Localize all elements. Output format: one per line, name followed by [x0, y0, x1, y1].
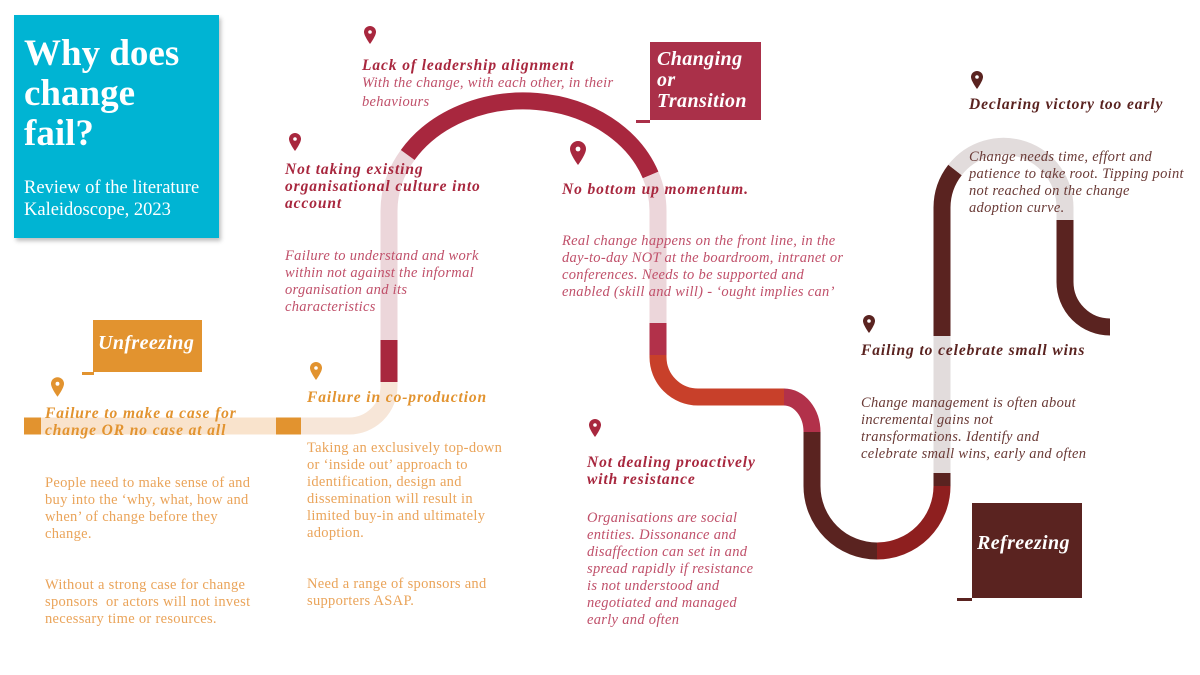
text: declaring victory: Change needs time, effort and [969, 149, 1152, 165]
stage box: Changing or Transition: Changing [657, 48, 742, 70]
text: resistance: with resistance [587, 471, 696, 488]
text: failure in co-production: dissemination will result in [307, 491, 473, 507]
text: leadership alignment: With the change, with each other, in their [362, 75, 613, 91]
text: small wins: Failing to celebrate small wins [861, 342, 1085, 359]
text: resistance: Not dealing proactively [587, 454, 756, 471]
text: failure in co-production: adoption. [307, 525, 364, 541]
title: change [24, 73, 135, 114]
text: declaring victory: patience to take root. Tipping point [969, 166, 1184, 182]
text: organisational culture [284, 161, 481, 315]
text: organisational culture: Failure to understand and work [285, 248, 479, 264]
text: failure to make a case: Without a strong case for change [45, 577, 245, 593]
text: failure to make a case: when’ of change before they [45, 509, 218, 525]
text: organisational culture: account [285, 195, 342, 212]
text: declaring victory: Declaring victory too early [969, 96, 1163, 113]
text: resistance: Organisations are social [587, 510, 737, 526]
text: resistance: early and often [587, 612, 679, 628]
subtitle: Review of the literature [24, 178, 199, 198]
text: failure to make a case: change OR no case at all [45, 422, 226, 439]
icon: pin leadership [364, 26, 376, 44]
text: resistance: entities. Dissonance and [587, 527, 736, 543]
text: failure in co-production: or ‘inside out’ approach to [307, 457, 468, 473]
text: resistance: disaffection can set in and [587, 544, 747, 560]
text: failure to make a case: necessary time or resources. [45, 611, 217, 627]
text: resistance: spread rapidly if resistance [587, 561, 753, 577]
text: leadership alignment: behaviours [362, 94, 429, 110]
stage box: Unfreezing: Unfreezing [98, 332, 194, 354]
text: declaring victory: not reached on the change [969, 183, 1130, 199]
icon: pin culture [289, 133, 301, 151]
text: bottom up momentum: conferences. Needs to be supported and [562, 267, 804, 283]
icon: pin co-production [310, 362, 322, 380]
text: failure to make a case [45, 405, 250, 627]
text: organisational culture: organisational culture into [285, 178, 481, 195]
text: failure in co-production: limited buy-in and ultimately [307, 508, 485, 524]
stage box: Changing or Transition [636, 42, 761, 123]
text: failure in co-production: supporters ASAP. [307, 593, 414, 609]
text: failure in co-production: Need a range of sponsors and [307, 576, 487, 592]
text: resistance [586, 454, 756, 628]
text: organisational culture: organisation and its [285, 282, 407, 298]
text: small wins [861, 342, 1086, 462]
text: bottom up momentum: day-to-day NOT at the boardroom, intranet or [562, 250, 843, 266]
text: resistance: is not understood and [587, 578, 719, 594]
text: bottom up momentum: enabled (skill and will) - ‘ought implies can’ [562, 284, 835, 300]
subtitle: Kaleidoscope, 2023 [24, 200, 171, 220]
text: organisational culture: within not against the informal [285, 265, 474, 281]
title panel [14, 15, 219, 238]
text: declaring victory [968, 96, 1184, 216]
icon: pin bottom up [570, 141, 586, 165]
text: failure in co-production: identification, design and [307, 474, 462, 490]
stage box: Unfreezing [82, 320, 202, 375]
icon: pin resistance [589, 419, 601, 437]
text: failure to make a case: change. [45, 526, 92, 542]
text: failure to make a case: Failure to make a case for [45, 405, 237, 422]
text: failure in co-production: Failure in co-production [307, 389, 487, 406]
stage box: Refreezing [957, 503, 1082, 601]
title [24, 33, 179, 154]
text: bottom up momentum: No bottom up momentum. [562, 181, 749, 198]
stage box: Changing or Transition: or [657, 69, 676, 91]
text: bottom up momentum [562, 181, 843, 300]
text: small wins: Change management is often about [861, 395, 1076, 411]
text: organisational culture: Not taking existing [285, 161, 424, 178]
text: declaring victory: adoption curve. [969, 200, 1065, 216]
text: failure to make a case: People need to make sense of and [45, 475, 250, 491]
icon: pin small wins [863, 315, 875, 333]
text: small wins: celebrate small wins, early and often [861, 446, 1086, 462]
stage box: Changing or Transition: Transition [657, 90, 747, 112]
text: failure to make a case: buy into the ‘why, what, how and [45, 492, 249, 508]
text: organisational culture: characteristics [285, 299, 376, 315]
icon: pin unfreezing [51, 377, 64, 397]
text: small wins: transformations. Identify and [861, 429, 1039, 445]
title: fail? [24, 113, 94, 154]
title: Why does [24, 33, 179, 74]
subtitle [24, 178, 199, 220]
stage box: Refreezing: Refreezing [977, 532, 1070, 554]
text: failure to make a case: sponsors or actors will not invest [45, 594, 250, 610]
text: small wins: incremental gains not [861, 412, 993, 428]
text: leadership alignment: Lack of leadership alignment [362, 57, 574, 74]
icon: pin declaring victory [971, 71, 983, 89]
text: failure in co-production [307, 389, 502, 609]
text: failure in co-production: Taking an exclusively top-down [307, 440, 502, 456]
text: leadership alignment [362, 57, 614, 110]
text: bottom up momentum: Real change happens on the front line, in the [562, 233, 836, 249]
text: resistance: negotiated and managed [587, 595, 737, 611]
